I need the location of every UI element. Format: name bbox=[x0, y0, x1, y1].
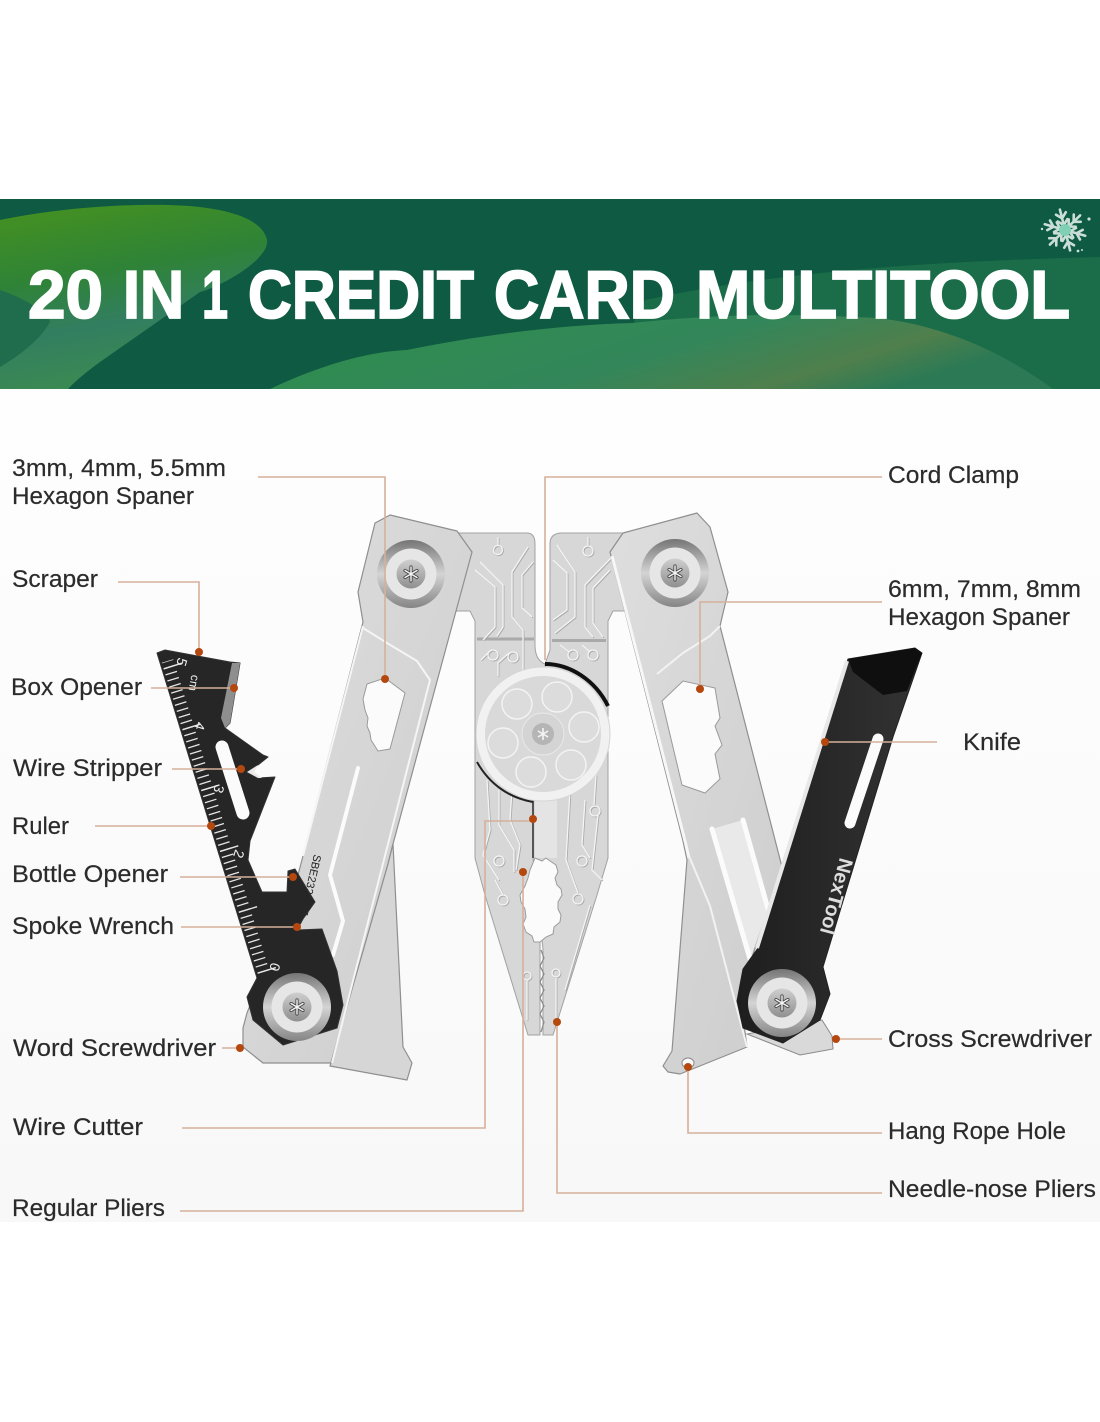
dark joint line bbox=[532, 800, 534, 858]
left handle bbox=[243, 515, 472, 1080]
callout: box opener: Box Opener bbox=[11, 674, 142, 701]
ruler numbers: 5 bbox=[173, 656, 191, 668]
callout: bottle opener: Bottle Opener bbox=[12, 861, 168, 888]
callout: wire cutter bbox=[13, 815, 537, 1141]
title: CREDIT bbox=[248, 257, 474, 333]
right handle bbox=[610, 513, 782, 1074]
callout: 3mm 4mm 5.5mm hexagon spanner bbox=[12, 455, 389, 683]
upper shadow arc bbox=[545, 664, 608, 706]
callout: cord clamp: Cord Clamp bbox=[888, 462, 1019, 489]
callout: regular pliers bbox=[12, 868, 527, 1222]
pliers right half bbox=[533, 533, 625, 1035]
ruler numbers: 3 bbox=[210, 783, 228, 795]
title: CARD bbox=[494, 257, 675, 333]
title: IN bbox=[123, 257, 184, 333]
blade slot bbox=[850, 739, 878, 823]
ruler numbers: 4 bbox=[191, 720, 209, 732]
knife blade bbox=[737, 648, 922, 1055]
callout: knife: Knife bbox=[963, 729, 1021, 756]
callout: spoke wrench bbox=[12, 913, 301, 940]
callout: hang rope hole bbox=[684, 1063, 1066, 1145]
callout: needle-nose pliers: Needle-nose Pliers bbox=[888, 1176, 1096, 1203]
ruler ticks bbox=[168, 661, 264, 972]
ruler numbers: 0 bbox=[266, 961, 284, 973]
title: 1 bbox=[202, 257, 228, 333]
ruler centimetre ticks bbox=[171, 660, 267, 971]
handle lower wedge bbox=[330, 844, 412, 1080]
brand text: NexTool bbox=[815, 856, 856, 937]
callout: hang rope hole: Hang Rope Hole bbox=[888, 1118, 1066, 1145]
pliers left half bbox=[455, 533, 545, 1035]
blade tip bevel bbox=[848, 648, 922, 695]
callout: 6mm 7mm 8mm hexagon spanner: 6mm, 7mm, 8mm bbox=[888, 576, 1081, 603]
lighter neck bbox=[535, 796, 557, 858]
wire stripper highlight bbox=[247, 765, 262, 778]
callout: ruler bbox=[12, 813, 215, 840]
slots bbox=[712, 820, 768, 959]
handle ridges bbox=[303, 626, 430, 1063]
thin spring slot bbox=[330, 768, 358, 955]
callout: word screwdriver: Word Screwdriver bbox=[13, 1035, 216, 1062]
callout: ruler: Ruler bbox=[12, 813, 69, 840]
callout: cord clamp bbox=[545, 462, 1019, 660]
bolt: top left bbox=[377, 540, 445, 608]
title bbox=[28, 257, 1070, 333]
callout: wire stripper bbox=[13, 755, 245, 782]
ruler numbers: 2 bbox=[230, 848, 248, 860]
callout: wire cutter: Wire Cutter bbox=[13, 1114, 143, 1141]
band across the pliers bbox=[477, 639, 606, 640]
icon: snowflake bbox=[1041, 208, 1091, 252]
callout: knife bbox=[821, 729, 1021, 756]
callout: scraper bbox=[12, 566, 203, 656]
title: MULTITOOL bbox=[696, 257, 1070, 333]
bolt: bottom right bbox=[748, 969, 816, 1037]
ruler numbers: cm bbox=[186, 674, 202, 692]
bolt: bottom left bbox=[263, 973, 331, 1041]
callout: 6mm 7mm 8mm hexagon spanner bbox=[696, 576, 1081, 693]
central pliers bbox=[455, 533, 625, 1035]
callout: spoke wrench: Spoke Wrench bbox=[12, 913, 174, 940]
bolt: top right bbox=[641, 539, 709, 607]
callout: 3mm 4mm 5.5mm hexagon spanner: 3mm, 4mm, 5.5mm bbox=[12, 455, 226, 482]
handle body bbox=[610, 513, 782, 1074]
sharpened edge bbox=[757, 661, 847, 948]
photo background bbox=[0, 389, 1100, 1222]
rope hole bbox=[682, 1058, 694, 1068]
callout: regular pliers: Regular Pliers bbox=[12, 1195, 165, 1222]
callout: wire stripper: Wire Stripper bbox=[13, 755, 162, 782]
lower shadow arc bbox=[477, 762, 533, 802]
banner bbox=[0, 199, 1100, 389]
pivot wheel bbox=[476, 667, 610, 801]
handle ridges bbox=[657, 626, 747, 1047]
callout: needle-nose pliers bbox=[553, 1018, 1096, 1203]
hexagon spanner hole bbox=[363, 678, 405, 751]
needle-nose serration bbox=[540, 950, 544, 1032]
box opener blade bbox=[221, 663, 240, 728]
blade body bbox=[737, 648, 922, 1043]
ruler body bbox=[157, 650, 343, 1045]
panel between slots bbox=[712, 820, 768, 959]
callout: cross screwdriver: Cross Screwdriver bbox=[888, 1026, 1092, 1053]
callout: bottle opener bbox=[12, 861, 297, 888]
ruler tool bbox=[157, 650, 343, 1045]
wire stripper slot bbox=[222, 747, 243, 813]
hexagon spanner hole bbox=[662, 681, 722, 793]
serial number: SBE2324 77 bbox=[297, 853, 323, 916]
callout: box opener bbox=[11, 674, 238, 701]
callout: 3mm 4mm 5.5mm hexagon spanner: Hexagon Spaner bbox=[12, 483, 194, 510]
callout: 6mm 7mm 8mm hexagon spanner: Hexagon Spaner bbox=[888, 604, 1070, 631]
wavy plier jaw opening bbox=[520, 858, 562, 942]
callout: scraper: Scraper bbox=[12, 566, 98, 593]
screwdriver tip bbox=[747, 1020, 833, 1055]
circuit traces bbox=[475, 537, 613, 1021]
handle body bbox=[243, 515, 472, 1063]
title: 20 bbox=[28, 257, 103, 333]
ruler numbers bbox=[173, 656, 284, 973]
edge highlight bbox=[612, 556, 689, 858]
